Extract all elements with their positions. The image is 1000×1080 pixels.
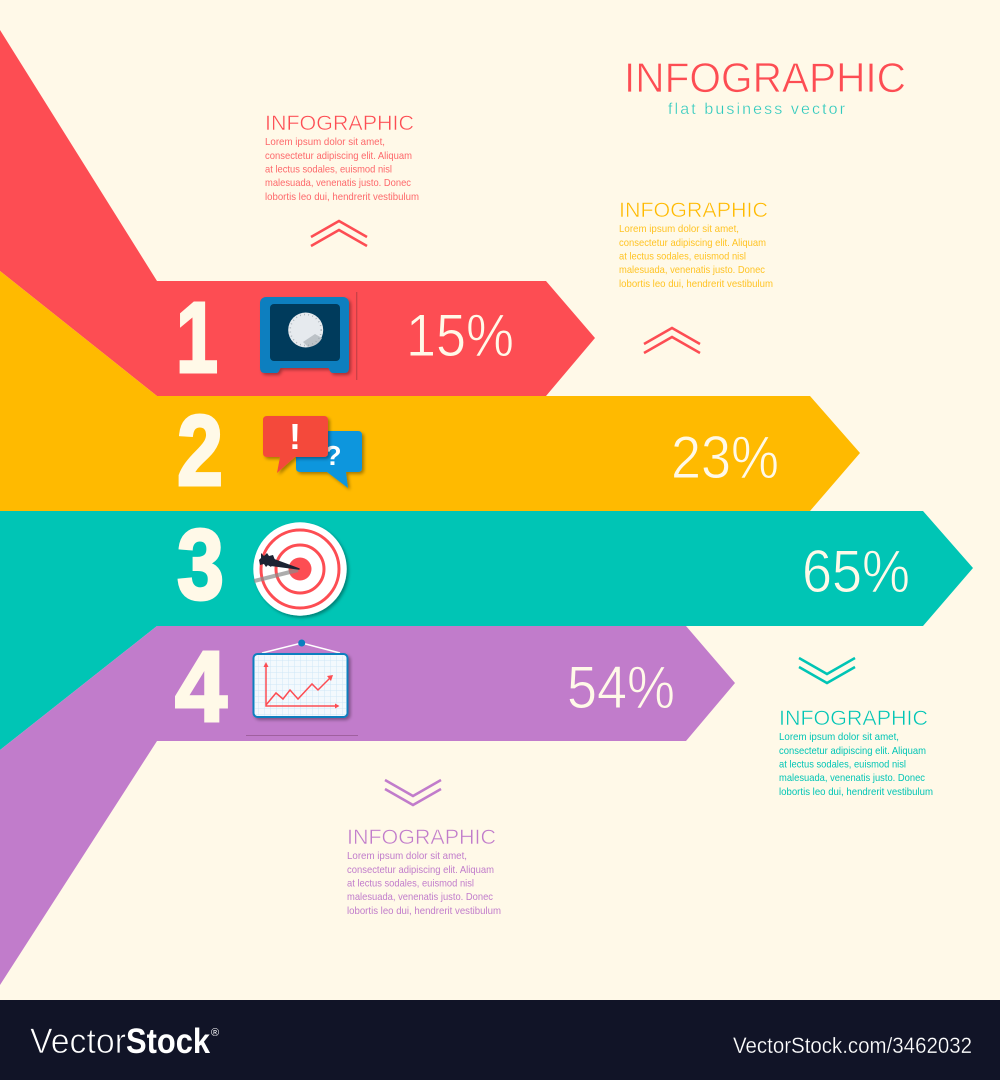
percentage 65: 65% xyxy=(802,538,910,605)
text block: red xyxy=(265,112,419,203)
panel: teal arrow 3 xyxy=(0,509,973,750)
text block: teal xyxy=(779,707,933,798)
text block: red: consectetur adipiscing elit. Aliquam xyxy=(265,150,412,162)
icon: safe xyxy=(260,297,349,373)
footer logo xyxy=(30,1022,219,1061)
number 4: 4 xyxy=(175,631,227,743)
icon: chart board xyxy=(254,640,348,717)
text block: purple: Lorem ipsum dolor sit amet, xyxy=(347,850,467,862)
footer logo: ® xyxy=(211,1027,219,1039)
text block: red: malesuada, venenatis justo. Donec xyxy=(265,177,411,189)
percentage 23: 23% xyxy=(671,424,779,491)
subtitle: flat business vector xyxy=(668,101,846,118)
chevron: red 1 xyxy=(311,221,367,246)
text block: yellow: consectetur adipiscing elit. Aliquam xyxy=(619,237,766,249)
chevron: teal xyxy=(799,658,855,683)
text block: purple: lobortis leo dui, hendrerit vestibulum xyxy=(347,905,501,917)
text block: purple: consectetur adipiscing elit. Aliquam xyxy=(347,864,494,876)
text block: purple: malesuada, venenatis justo. Donec xyxy=(347,891,493,903)
number 2: 2 xyxy=(177,395,223,507)
panel: red arrow 1 xyxy=(0,30,595,396)
teal arrow shape xyxy=(0,511,973,750)
chevron: red 2 xyxy=(644,328,700,353)
purple arrow shape xyxy=(0,626,735,985)
text block: yellow xyxy=(619,199,773,290)
text block: yellow: INFOGRAPHIC xyxy=(619,199,768,222)
text block: red: INFOGRAPHIC xyxy=(265,112,414,135)
text block: yellow: lobortis leo dui, hendrerit vestibulum xyxy=(619,278,773,290)
icon: speech bubbles: ? xyxy=(324,440,342,471)
text block: purple: INFOGRAPHIC xyxy=(347,826,496,849)
text block: yellow: at lectus sodales, euismod nisl xyxy=(619,250,746,262)
icon: speech bubbles: ! xyxy=(289,416,301,457)
panel: yellow arrow 2 xyxy=(0,271,860,511)
title: INFOGRAPHIC xyxy=(624,54,906,101)
chevron: purple xyxy=(385,780,441,805)
text block: teal: malesuada, venenatis justo. Donec xyxy=(779,772,925,784)
number 3: 3 xyxy=(177,509,224,621)
text block: red: lobortis leo dui, hendrerit vestibulum xyxy=(265,191,419,203)
footer logo: Vector xyxy=(30,1022,126,1061)
text block: yellow: malesuada, venenatis justo. Donec xyxy=(619,264,765,276)
icon: speech bubbles xyxy=(263,416,362,488)
panel: purple arrow 4 xyxy=(0,626,735,985)
footer logo: Stock xyxy=(126,1022,210,1061)
text block: purple xyxy=(347,826,501,917)
footer id: VectorStock.com/3462032 xyxy=(733,1033,972,1058)
icon: target xyxy=(253,522,347,616)
yellow arrow shape xyxy=(0,271,860,511)
text block: teal: lobortis leo dui, hendrerit vestibulum xyxy=(779,786,933,798)
text block: red: Lorem ipsum dolor sit amet, xyxy=(265,136,385,148)
number 1: 1 xyxy=(176,282,218,394)
percentage 54: 54% xyxy=(567,654,675,721)
red arrow shape xyxy=(0,30,595,396)
footer bar xyxy=(0,1000,1000,1080)
text block: yellow: Lorem ipsum dolor sit amet, xyxy=(619,223,739,235)
text block: teal: consectetur adipiscing elit. Aliquam xyxy=(779,745,926,757)
text block: red: at lectus sodales, euismod nisl xyxy=(265,164,392,176)
percentage 15: 15% xyxy=(406,302,514,369)
text block: purple: at lectus sodales, euismod nisl xyxy=(347,878,474,890)
text block: teal: at lectus sodales, euismod nisl xyxy=(779,758,906,770)
text block: teal: INFOGRAPHIC xyxy=(779,707,928,730)
text block: teal: Lorem ipsum dolor sit amet, xyxy=(779,731,899,743)
